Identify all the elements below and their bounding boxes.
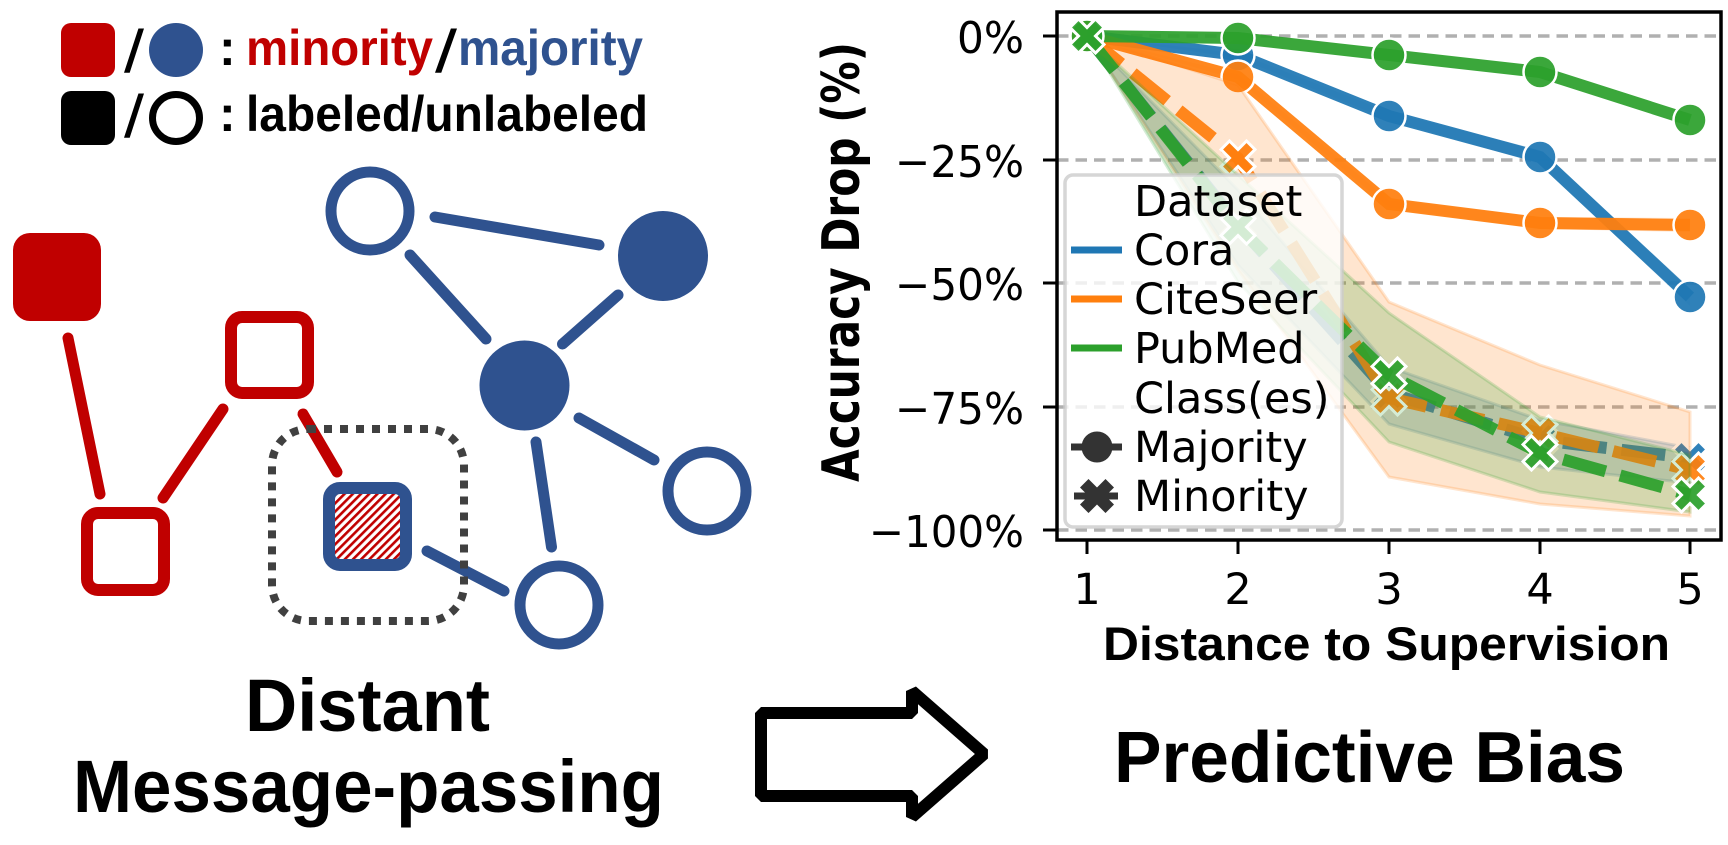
- majority edges: [410, 217, 654, 591]
- icon: unlabeled hollow circle: [152, 94, 200, 142]
- x axis ticks and labels: 3: [1375, 565, 1403, 615]
- graph diagram: message passing network: [13, 172, 746, 644]
- series: PubMed minority: [1070, 19, 1707, 512]
- plot frame: [1057, 12, 1721, 540]
- node: labeled majority centre: [480, 340, 570, 430]
- x axis ticks and labels: 4: [1526, 565, 1554, 615]
- x axis title: Distance to Supervision: [1103, 617, 1670, 670]
- text: majority: majority: [458, 20, 643, 76]
- node: unlabeled majority bottom: [520, 566, 598, 644]
- y axis ticks and labels: −25%: [895, 137, 1024, 188]
- legend item: Minority: Minority: [1134, 472, 1309, 522]
- icon: minority red square: [61, 23, 115, 77]
- x axis ticks and labels: [1073, 540, 1704, 615]
- legend title: Dataset: Dataset: [1134, 177, 1302, 227]
- x axis ticks and labels: 1: [1073, 565, 1101, 615]
- series: CiteSeer majority: [1070, 20, 1706, 242]
- y axis ticks and labels: −50%: [895, 260, 1024, 311]
- text: minority: minority: [246, 20, 433, 76]
- chart legend: [1065, 175, 1342, 527]
- legend title: Class(es): Class(es): [1134, 374, 1330, 424]
- icon: labeled black square: [61, 91, 115, 145]
- heading: Distant Message-passing: [73, 664, 664, 828]
- dotted neighbourhood box: [272, 429, 464, 621]
- slash separator: /: [124, 83, 144, 150]
- y axis ticks and labels: −100%: [869, 507, 1024, 558]
- y axis ticks and labels: 0%: [957, 13, 1024, 64]
- minority edges: [68, 338, 337, 498]
- legend item: CiteSeer: CiteSeer: [1134, 275, 1317, 325]
- icon: majority blue circle: [149, 23, 203, 77]
- grid lines: [1057, 36, 1721, 530]
- text: labeled/unlabeled: labeled/unlabeled: [246, 86, 648, 142]
- series: Cora majority: [1070, 20, 1706, 314]
- y axis ticks and labels: [869, 13, 1057, 558]
- legend item: Majority: Majority: [1134, 423, 1308, 473]
- slash separator: /: [124, 18, 144, 85]
- node: labeled majority right: [618, 211, 708, 301]
- heading: Predictive Bias: Predictive Bias: [1114, 718, 1625, 798]
- series: Cora minority: [1087, 36, 1707, 483]
- slash separator: /: [435, 18, 457, 85]
- node: labeled minority: [13, 233, 101, 321]
- node: unlabeled majority top: [331, 172, 409, 250]
- x axis ticks and labels: 5: [1676, 565, 1704, 615]
- colon: :: [219, 86, 236, 142]
- legend item: Cora: Cora: [1134, 226, 1234, 276]
- legend item: PubMed: PubMed: [1134, 324, 1305, 374]
- line chart: accuracy drop vs distance to supervision: [812, 12, 1721, 670]
- node: unlabeled minority bottom: [87, 513, 164, 590]
- node: hatched conflicted node: [329, 488, 406, 565]
- node: unlabeled minority top: [231, 317, 308, 393]
- legend: node colour and label key: [61, 18, 648, 150]
- arrow: [761, 691, 984, 817]
- heading: Distant Message-passing: Distant: [245, 664, 490, 747]
- node: unlabeled majority right: [668, 452, 746, 530]
- series: PubMed majority: [1070, 20, 1706, 136]
- heading: Distant Message-passing: Message-passing: [73, 745, 664, 828]
- series: CiteSeer minority: [1087, 36, 1707, 516]
- colon: :: [219, 20, 236, 76]
- legend box: [1065, 175, 1342, 527]
- x axis ticks and labels: 2: [1224, 565, 1252, 615]
- y axis ticks and labels: −75%: [895, 384, 1024, 435]
